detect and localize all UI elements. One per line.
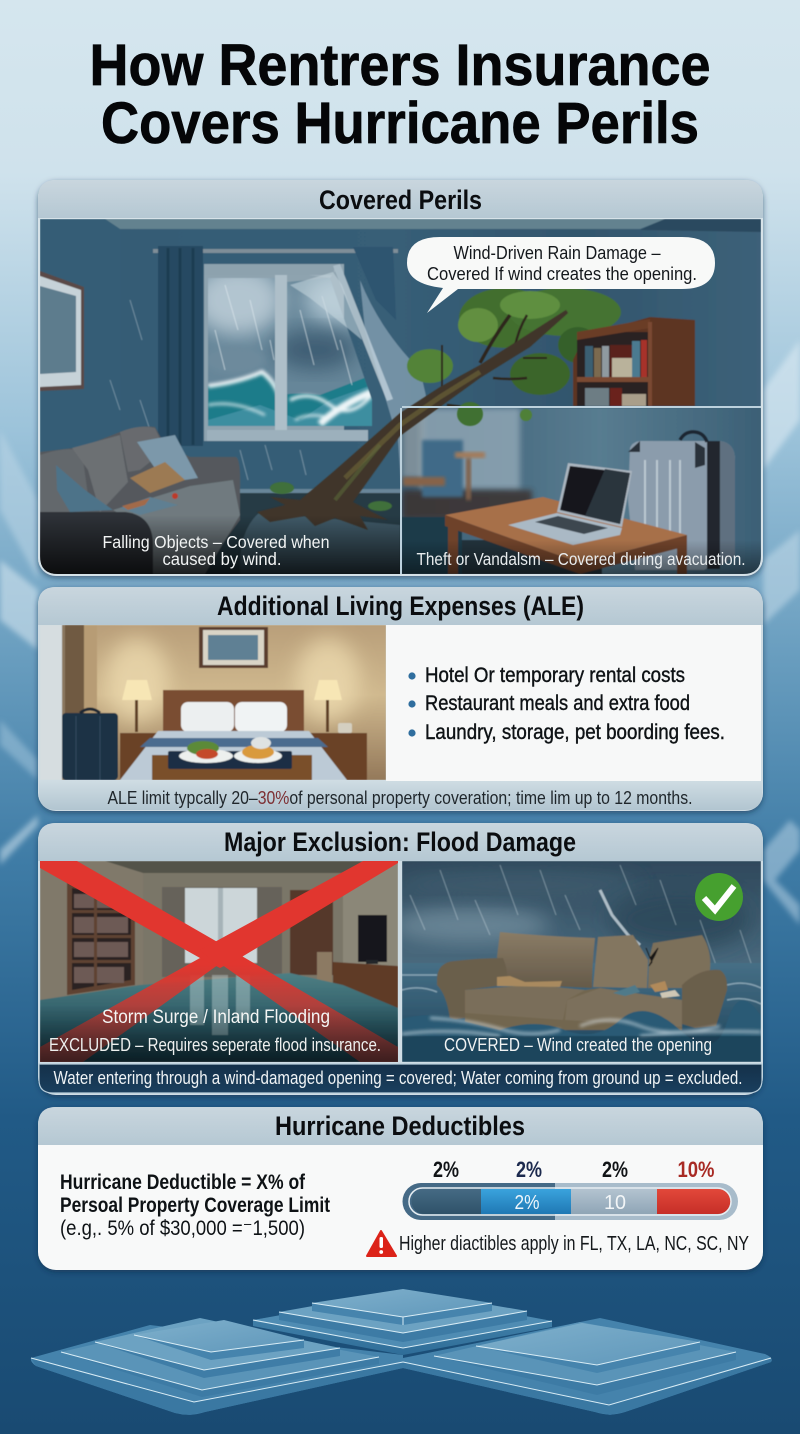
bookcase [67, 880, 135, 995]
platform: left [31, 1318, 403, 1415]
heading: covered perils: Covered Perils [319, 185, 482, 215]
bar chart: deductible levels [403, 1157, 738, 1220]
illustration: hotel room [40, 625, 386, 780]
sofa [40, 427, 240, 574]
bullet list [386, 625, 761, 781]
platform: center [253, 1289, 552, 1355]
curtains [158, 246, 426, 500]
foliage [407, 288, 621, 395]
bookcase [573, 317, 695, 406]
framed picture [40, 271, 84, 391]
bullet list: Hotel Or temporary rental costs [425, 664, 685, 687]
red X mark [40, 861, 398, 1062]
table [445, 497, 687, 574]
title: Covers Hurricane Perils [101, 91, 699, 156]
bar chart: deductible levels: 2% [433, 1157, 459, 1182]
heading: hurricane deductibles: Hurricane Deductibles [275, 1111, 525, 1141]
caption: covered: COVERED – Wind created the opening [444, 1035, 712, 1055]
illustration: storm-hit sofa [390, 861, 761, 1062]
title: How Rentrers Insurance [90, 33, 710, 98]
caption: falling objects: caused by wind. [162, 549, 282, 569]
bar chart: deductible levels: 2% [602, 1157, 628, 1182]
window [193, 264, 393, 441]
branches [442, 315, 547, 387]
panel: flood exclusion [38, 823, 763, 1095]
footnote: ALE limit [39, 781, 762, 810]
caption: falling objects [104, 535, 328, 568]
panel: hurricane deductibles [38, 1107, 763, 1270]
bar chart: deductible levels: 10% [678, 1157, 714, 1182]
sofa [437, 932, 727, 1030]
panel: covered perils [38, 180, 763, 576]
caption: storm surge: Storm Surge / Inland Flooding [102, 1007, 330, 1028]
icon: green check [695, 873, 743, 921]
tree [257, 310, 568, 530]
television and desk [317, 915, 398, 1008]
formula text: Hurricane Deductible = X% of [60, 1171, 306, 1194]
formula text [60, 1171, 330, 1240]
formula text: (e.g,. 5% of $30,000 =⁻1,500) [60, 1217, 305, 1240]
formula text: Persoal Property Coverage Limit [60, 1194, 330, 1217]
footnote: ALE limit: ALE limit typcally 20–30%of personal property coveration; time lim up to 12 months. [108, 788, 692, 808]
title [90, 33, 710, 156]
bar chart: deductible levels: 2% [514, 1192, 540, 1214]
bar chart: deductible levels: 10 [604, 1192, 626, 1214]
callout: wind-driven rain: Wind-Driven Rain Damage – [454, 243, 660, 263]
illustration: flooded room with red X [40, 861, 398, 1062]
suitcase [628, 432, 735, 570]
heading: major exclusion: Major Exclusion: Flood Damage [224, 827, 576, 857]
footnote: water rule [39, 1064, 762, 1093]
caption: falling objects: Falling Objects – Covered when [102, 532, 330, 552]
illustration: storm damaged living room [40, 219, 761, 575]
panel: additional living expenses [38, 587, 763, 811]
bullet list: Laundry, storage, pet boording fees. [425, 721, 725, 744]
callout: wind-driven rain [407, 237, 715, 313]
laptop [508, 463, 632, 545]
callout: wind-driven rain: Covered If wind creates the opening. [427, 264, 697, 284]
caption: theft or vandalism: Theft or Vandalsm – Covered during avacuation. [416, 549, 746, 569]
icon: warning triangle [367, 1231, 396, 1256]
bullet list: Restaurant meals and extra food [425, 692, 690, 715]
inset: laptop and suitcase [402, 408, 761, 574]
platform: right [403, 1318, 772, 1415]
bar chart: deductible levels: 2% [516, 1157, 542, 1182]
stacked platforms [31, 1289, 772, 1415]
caption: excluded: EXCLUDED – Requires seperate flood insurance. [49, 1035, 381, 1055]
heading: ALE: Additional Living Expenses (ALE) [217, 591, 584, 621]
